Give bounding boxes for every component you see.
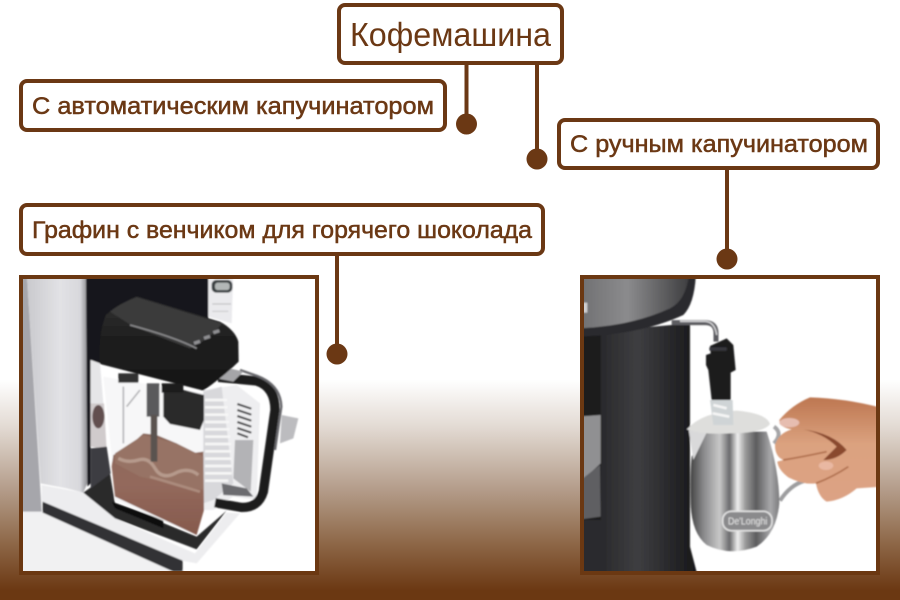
label: manual cappuccinatore: С ручным капучинатором [570,131,868,158]
machine dark upper part [86,272,233,488]
label: carafe with whisk: Графин с венчиком для горячего шоколада [32,217,533,244]
connector: carafe label to marker [326,255,348,364]
whisk shaft [147,383,159,462]
machine body [577,323,698,578]
machine top cover [584,279,697,336]
label: automatic cappuccinatore: С автоматическим капучинатором [32,93,434,120]
steam pipe [672,321,717,342]
panel: carafe photo [17,272,319,578]
carafe handle [215,368,281,507]
heading: coffee machine: Кофемашина [350,16,552,53]
frother nozzle [706,338,736,400]
panel: milk jug photo [577,272,883,578]
carafe lid [100,297,239,393]
chocolate [112,433,204,535]
floor [23,510,183,571]
carafe glass [103,377,260,535]
milk foam [687,400,770,434]
label: manual cappuccinatore [559,120,878,168]
black nozzle [163,385,204,430]
connector: machine to automatic cappuccinatore marker [456,64,477,134]
steel jug: De'Longhi [728,517,767,528]
hand [775,397,883,502]
label: carafe with whisk [21,205,543,254]
connector: machine to manual cappuccinatore marker [526,64,548,170]
steel jug [689,430,779,551]
label: automatic cappuccinatore [21,81,445,130]
jug handle [774,427,805,501]
heading: coffee machine [339,5,562,63]
machine silver column [17,272,87,512]
machine base and tray [42,415,298,572]
connector: manual label to marker [716,169,738,270]
